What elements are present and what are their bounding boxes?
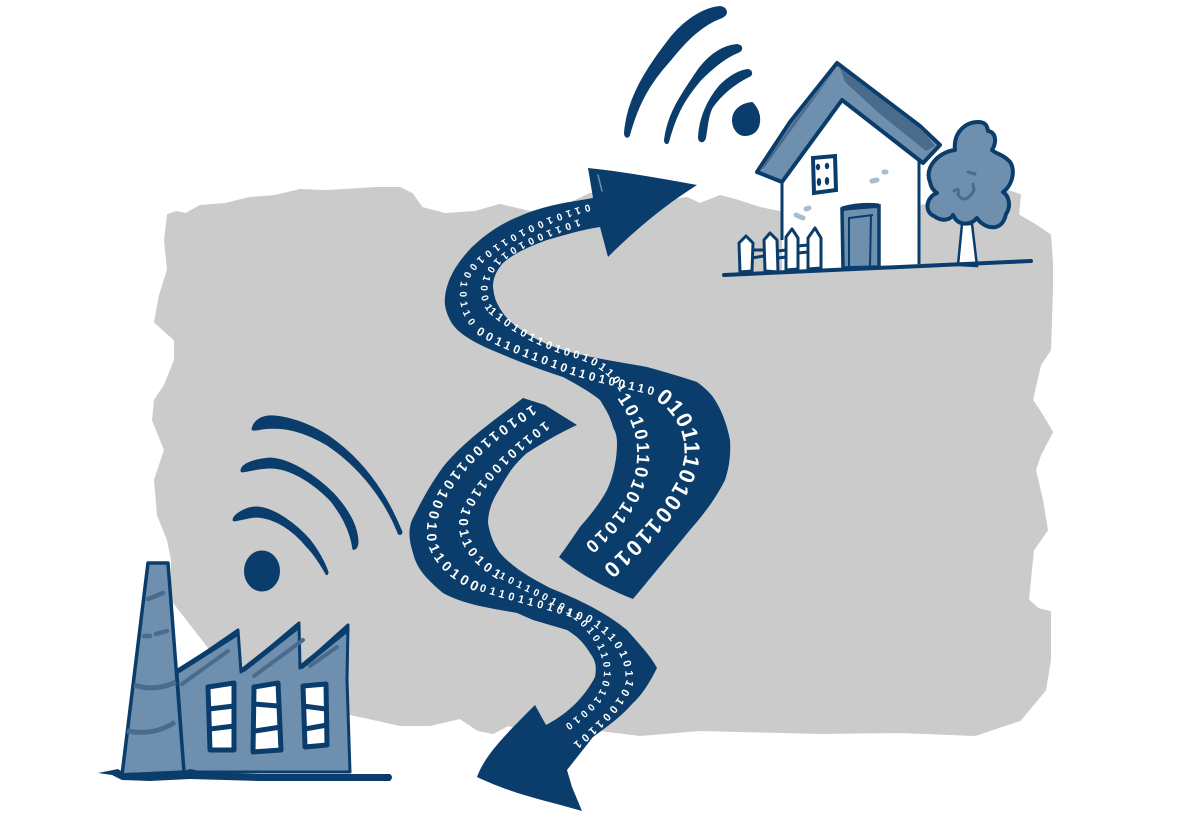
signal arc outer [252, 416, 402, 534]
tree trunk [958, 224, 977, 266]
door [842, 205, 879, 268]
picket fence [739, 228, 821, 272]
stream body and arrowhead pointing up-right [445, 168, 730, 599]
binary digits along the upper stream: 110101101001011010 [488, 308, 626, 392]
signal source dot [244, 551, 280, 591]
binary digits along the upper stream: 0011011010110100110101 [477, 328, 654, 395]
tree crown [928, 122, 1013, 227]
binary digits along the lower stream: 0110110101001110101101001101101010110101 [480, 584, 634, 748]
signal source dot [733, 103, 759, 135]
factory building [177, 623, 350, 772]
icon: house with fence and tree [724, 63, 1031, 275]
binary digits along the upper stream: 1010110101101010 [587, 394, 650, 552]
house window [813, 156, 836, 193]
binary digits along the lower stream: 10110010110101101011001011010110 [499, 572, 611, 730]
stream body and arrowhead pointing down-left [409, 398, 657, 811]
data stream: lower section with arrow [409, 398, 657, 811]
binary digits along the upper stream [460, 204, 700, 576]
binary digits along the lower stream: 1011010011010110101 [459, 422, 549, 580]
icon: factory with chimney [98, 563, 392, 781]
icon: wifi signal above the factory [233, 416, 402, 591]
roof [757, 63, 940, 182]
signal arc inner [233, 507, 328, 575]
binary digits along the lower stream [426, 405, 634, 748]
signal arc middle [665, 45, 741, 143]
brick marks [796, 172, 886, 218]
house walls [782, 100, 919, 270]
binary digits along the lower stream: 1010110011010010110100101 [426, 405, 536, 590]
small highlight on arrowhead [598, 175, 602, 191]
binary digits along the upper stream: 1011001011010011010110 [480, 219, 580, 312]
grey background blob [153, 188, 1052, 735]
ground line [724, 261, 1031, 275]
signal arc inner [699, 70, 751, 141]
factory windows [208, 683, 327, 752]
icon: wifi signal above the house [625, 7, 759, 143]
data stream: upper section with arrow [444, 168, 730, 599]
tree crown shading [954, 172, 975, 199]
chimney [122, 563, 184, 775]
signal arc middle [241, 458, 358, 549]
factory ground line [98, 769, 392, 781]
factory roof accents [178, 626, 348, 671]
chimney shading [144, 593, 167, 636]
binary digits along the upper stream: 0110100101101001011010010110 [460, 204, 590, 325]
signal arc outer [625, 7, 726, 137]
roof shading [760, 68, 935, 170]
